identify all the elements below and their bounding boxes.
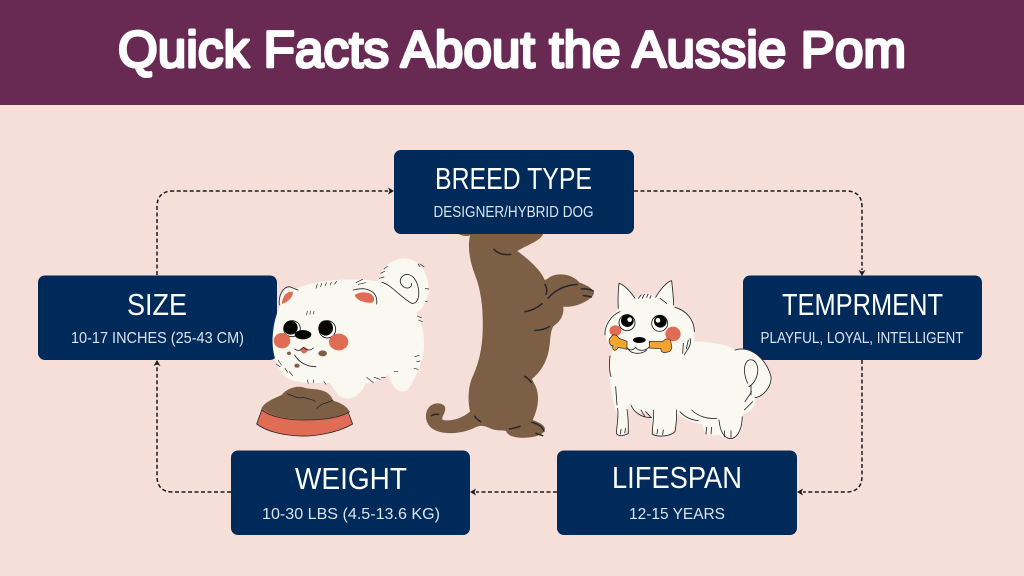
illustration: brown standing dog <box>426 232 594 438</box>
ears and outline <box>605 281 771 439</box>
box: temperament <box>743 276 982 360</box>
arrow: temperament to lifespan <box>797 360 862 496</box>
heading: breed type: BREED TYPE <box>435 161 592 196</box>
title: Quick Facts About the Aussie Pom <box>118 21 906 78</box>
arrow: size to breed type <box>157 188 394 275</box>
header band <box>0 0 1024 105</box>
arrow: lifespan to weight <box>470 488 557 496</box>
illustration: white dog with food bowl <box>257 258 429 436</box>
face: eyes and nose <box>284 320 336 339</box>
text: breed type value: DESIGNER/HYBRID DOG <box>434 204 594 221</box>
food bowl <box>257 387 353 436</box>
box: weight <box>231 450 470 535</box>
eyes and nose <box>619 314 668 343</box>
fur strokes <box>276 264 429 384</box>
arrow: weight to size <box>154 360 231 492</box>
heading: weight: WEIGHT <box>295 461 407 496</box>
heading: temperament: TEMPRMENT <box>782 287 943 322</box>
box: breed type <box>394 150 634 234</box>
cheeks <box>609 325 681 341</box>
arrow: breed type to temperament <box>634 191 866 276</box>
text: lifespan value: 12-15 YEARS <box>629 506 725 523</box>
ears <box>282 292 374 304</box>
text: temperament value: PLAYFUL, LOYAL, INTELLIGENT <box>760 330 964 347</box>
text: weight value: 10-30 LBS (4.5-13.6 KG) <box>262 506 440 523</box>
box: lifespan <box>557 450 797 535</box>
illustration: white dog with bone <box>605 281 771 439</box>
heading: size: SIZE <box>127 287 187 322</box>
cheeks and mouth <box>274 333 348 368</box>
bone in mouth <box>609 335 672 353</box>
heading: lifespan: LIFESPAN <box>612 460 742 495</box>
text: size value: 10-17 INCHES (25-43 CM) <box>71 330 244 347</box>
box: size <box>38 276 277 360</box>
